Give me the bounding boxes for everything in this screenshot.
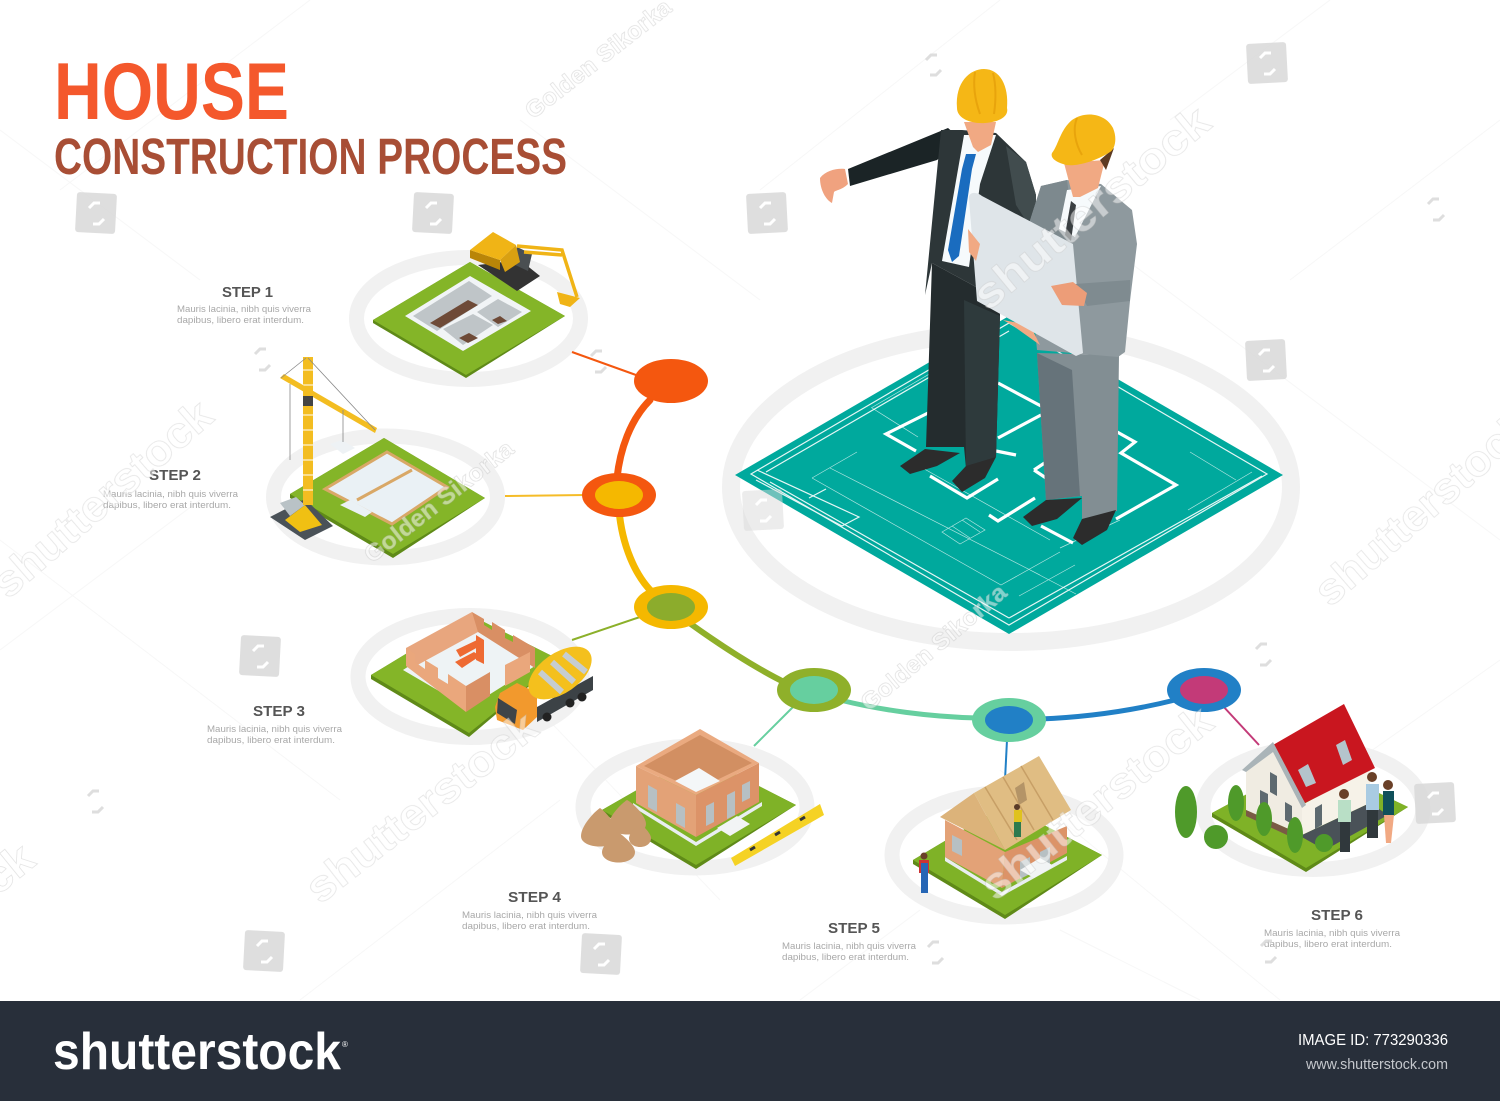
- shrubs: [1175, 785, 1333, 853]
- title: [54, 47, 567, 185]
- timeline nodes: [582, 359, 1241, 742]
- step 6 label: Mauris lacinia, nibh quis viverra: [1264, 928, 1401, 939]
- step 1 label: STEP 1: [222, 284, 273, 301]
- shutterstock watermark text: Golden Sikorka: [359, 435, 520, 569]
- shutterstock watermark text: shutterstock: [963, 96, 1220, 320]
- title: CONSTRUCTION PROCESS: [54, 128, 567, 185]
- shutterstock watermark text: Golden Sikorka: [856, 579, 1013, 717]
- step 5 label: dapibus, libero erat interdum.: [782, 952, 909, 963]
- step 5 illustration: house with roof frame: [913, 756, 1102, 919]
- step 2 label: [103, 467, 239, 511]
- footer bar: shutterstock: [53, 1023, 341, 1081]
- step 4 illustration: brick house shell: [581, 729, 824, 869]
- step 4 label: [462, 889, 598, 932]
- man in grey suit: [968, 114, 1137, 545]
- step 3 label: Mauris lacinia, nibh quis viverra: [207, 724, 343, 735]
- step 3 label: dapibus, libero erat interdum.: [207, 735, 335, 746]
- man in dark suit: [820, 69, 1036, 492]
- step 2 label: Mauris lacinia, nibh quis viverra: [103, 489, 239, 500]
- step 4 label: Mauris lacinia, nibh quis viverra: [462, 910, 598, 921]
- step 1 label: dapibus, libero erat interdum.: [177, 315, 304, 326]
- footer bar: IMAGE ID: 773290336: [1298, 1032, 1448, 1049]
- step 6 label: [1264, 907, 1401, 950]
- step rings: [274, 258, 1423, 917]
- step 2 label: STEP 2: [149, 467, 201, 484]
- step 5 label: Mauris lacinia, nibh quis viverra: [782, 941, 917, 952]
- step 4 label: STEP 4: [508, 889, 562, 906]
- shoes grey man: [1023, 498, 1116, 545]
- footer bar: ®: [342, 1040, 348, 1049]
- timeline path: [617, 400, 1175, 719]
- shoes dark: [900, 449, 996, 492]
- footer bar: www.shutterstock.com: [1305, 1057, 1448, 1073]
- step 2 label: dapibus, libero erat interdum.: [103, 500, 231, 511]
- watermark badges: [75, 42, 1456, 975]
- step 3 illustration: brick walls and mixer truck: [371, 612, 601, 737]
- sand piles: [581, 800, 651, 862]
- worker on ground: [919, 852, 929, 893]
- blueprint sheet: [969, 193, 1083, 356]
- worker on roof: [1014, 804, 1022, 837]
- three people: [1338, 772, 1394, 852]
- title: HOUSE: [54, 47, 289, 137]
- blueprint plate: [735, 316, 1283, 634]
- step 3 label: [207, 703, 343, 746]
- footer bar: [0, 1001, 1500, 1101]
- step 1 illustration: excavation: [373, 232, 580, 378]
- step 5 label: STEP 5: [828, 920, 880, 937]
- step 1 label: Mauris lacinia, nibh quis viverra: [177, 304, 312, 315]
- step 3 label: STEP 3: [253, 703, 305, 720]
- shutterstock watermark text: shutterstock: [971, 696, 1222, 910]
- step 6 label: STEP 6: [1311, 907, 1363, 924]
- step 4 label: dapibus, libero erat interdum.: [462, 921, 590, 932]
- step 6 label: dapibus, libero erat interdum.: [1264, 939, 1392, 950]
- step 5 label: [782, 920, 917, 963]
- shutterstock watermark text: shutterstock: [296, 702, 547, 913]
- step 1 label: [177, 284, 312, 326]
- timeline connectors: [505, 352, 1259, 780]
- step 6 illustration: finished house and people: [1175, 704, 1408, 872]
- step 2 illustration: crane and slab: [270, 357, 485, 558]
